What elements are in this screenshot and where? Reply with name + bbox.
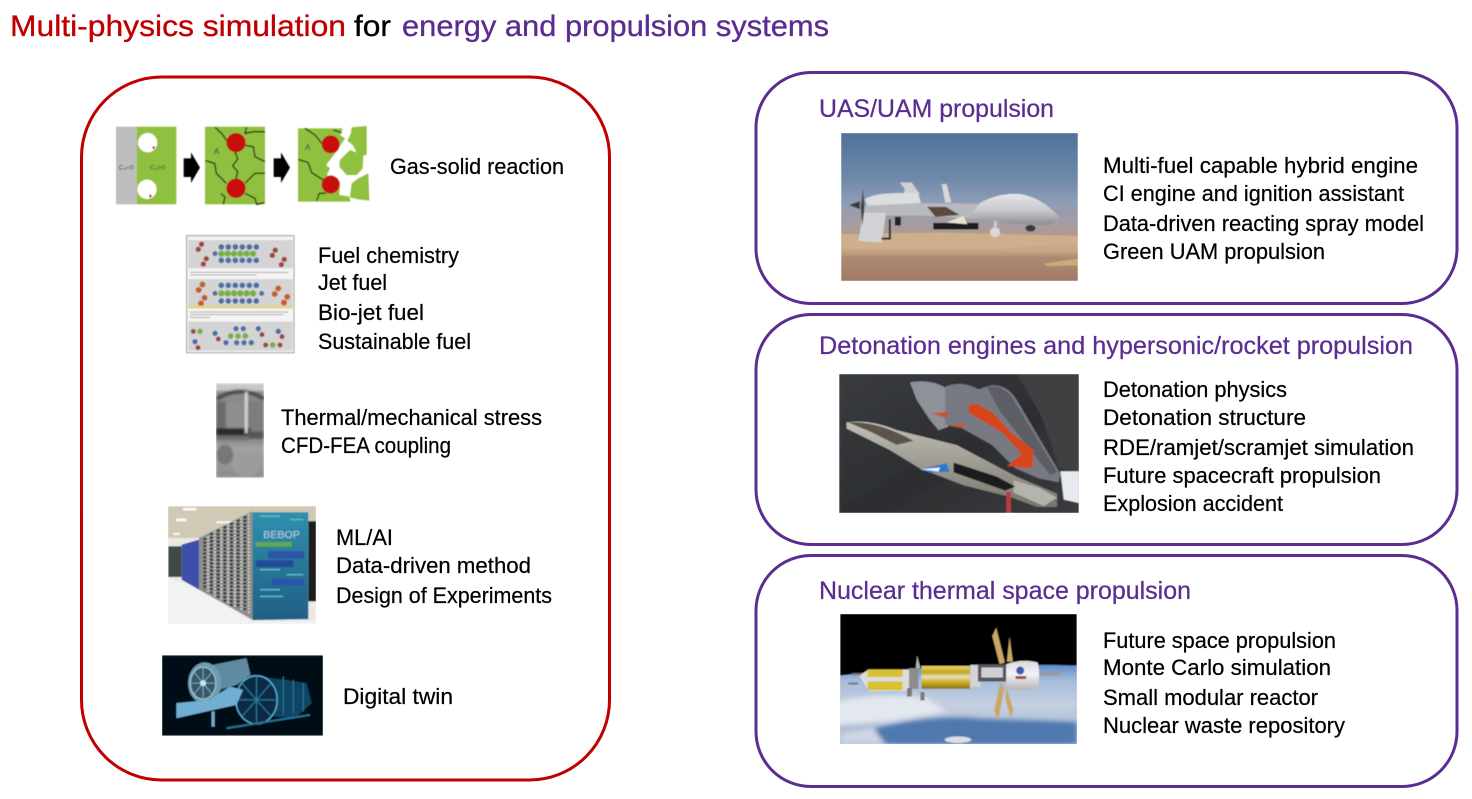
icon: gas-solid reaction diagram: C₄>0	[150, 164, 165, 171]
text: fuel topics: Fuel chemistry	[318, 243, 459, 268]
heading: UAS/UAM propulsion: UAS/UAM propulsion	[819, 95, 1054, 123]
text: thermal and coupling: CFD-FEA coupling	[281, 433, 451, 458]
image: BEBOP supercomputer: BEBOP	[263, 530, 300, 541]
title: for	[354, 10, 391, 43]
image: BEBOP supercomputer	[168, 506, 316, 624]
text: machine learning topics	[336, 525, 552, 608]
panel: detonation engines and hypersonic propulsion	[756, 314, 1457, 544]
text: gas-solid reaction: Gas-solid reaction	[390, 154, 564, 179]
image: drone in flight	[841, 133, 1078, 281]
image: nuclear spacecraft over earth	[820, 614, 1077, 744]
text: machine learning topics: Data-driven method	[336, 553, 531, 578]
text: fuel topics	[318, 243, 471, 354]
text: digital twin: Digital twin	[343, 684, 453, 709]
text: machine learning topics: Design of Experiments	[336, 583, 552, 608]
icon: gas-solid reaction diagram	[116, 126, 369, 204]
panel: nuclear thermal space propulsion	[756, 556, 1457, 786]
text: nuclear topics: Nuclear waste repository	[1103, 713, 1345, 738]
image: fuel chemistry molecules	[187, 236, 294, 353]
text: UAS/UAM topics: Data-driven reacting spray model	[1103, 211, 1424, 236]
text: detonation topics: Detonation physics	[1103, 377, 1287, 402]
text: thermal and coupling: Thermal/mechanical stress	[281, 405, 542, 430]
text: UAS/UAM topics: Multi-fuel capable hybrid engine	[1103, 153, 1418, 178]
text: detonation topics: Detonation structure	[1103, 405, 1306, 430]
icon: gas-solid reaction diagram: A	[305, 143, 311, 152]
panel: multi-physics simulation	[82, 77, 610, 780]
icon: gas-solid reaction diagram: A	[214, 147, 220, 156]
image: thermal stress micrograph	[216, 383, 264, 478]
text: detonation topics: RDE/ramjet/scramjet simulation	[1103, 435, 1414, 460]
text: machine learning topics: ML/AI	[336, 525, 393, 550]
text: UAS/UAM topics: CI engine and ignition assistant	[1103, 181, 1404, 206]
heading: detonation engines: Detonation engines and hypersonic/rocket propulsion	[819, 332, 1413, 360]
text: nuclear topics: Monte Carlo simulation	[1103, 655, 1331, 680]
title: energy and propulsion systems	[402, 10, 829, 43]
text: detonation topics: Future spacecraft propulsion	[1103, 463, 1381, 488]
heading: nuclear thermal: Nuclear thermal space propulsion	[819, 577, 1191, 605]
image: hypersonic vehicle under wing	[839, 374, 1079, 513]
text: nuclear topics	[1103, 628, 1345, 738]
text: detonation topics	[1103, 377, 1414, 516]
text: thermal and coupling	[281, 405, 542, 458]
icon: gas-solid reaction diagram: C₄=0	[119, 164, 134, 171]
text: detonation topics: Explosion accident	[1103, 491, 1283, 516]
text: nuclear topics: Small modular reactor	[1103, 685, 1318, 710]
text: fuel topics: Sustainable fuel	[318, 329, 471, 354]
text: UAS/UAM topics	[1103, 153, 1424, 264]
text: fuel topics: Jet fuel	[318, 270, 387, 295]
text: fuel topics: Bio-jet fuel	[318, 300, 424, 325]
title: Multi-physics simulation	[10, 10, 346, 43]
text: UAS/UAM topics: Green UAM propulsion	[1103, 239, 1325, 264]
image: digital twin engine	[162, 655, 323, 736]
text: nuclear topics: Future space propulsion	[1103, 628, 1336, 653]
title	[10, 10, 829, 43]
panel: UAS/UAM propulsion	[756, 72, 1457, 304]
